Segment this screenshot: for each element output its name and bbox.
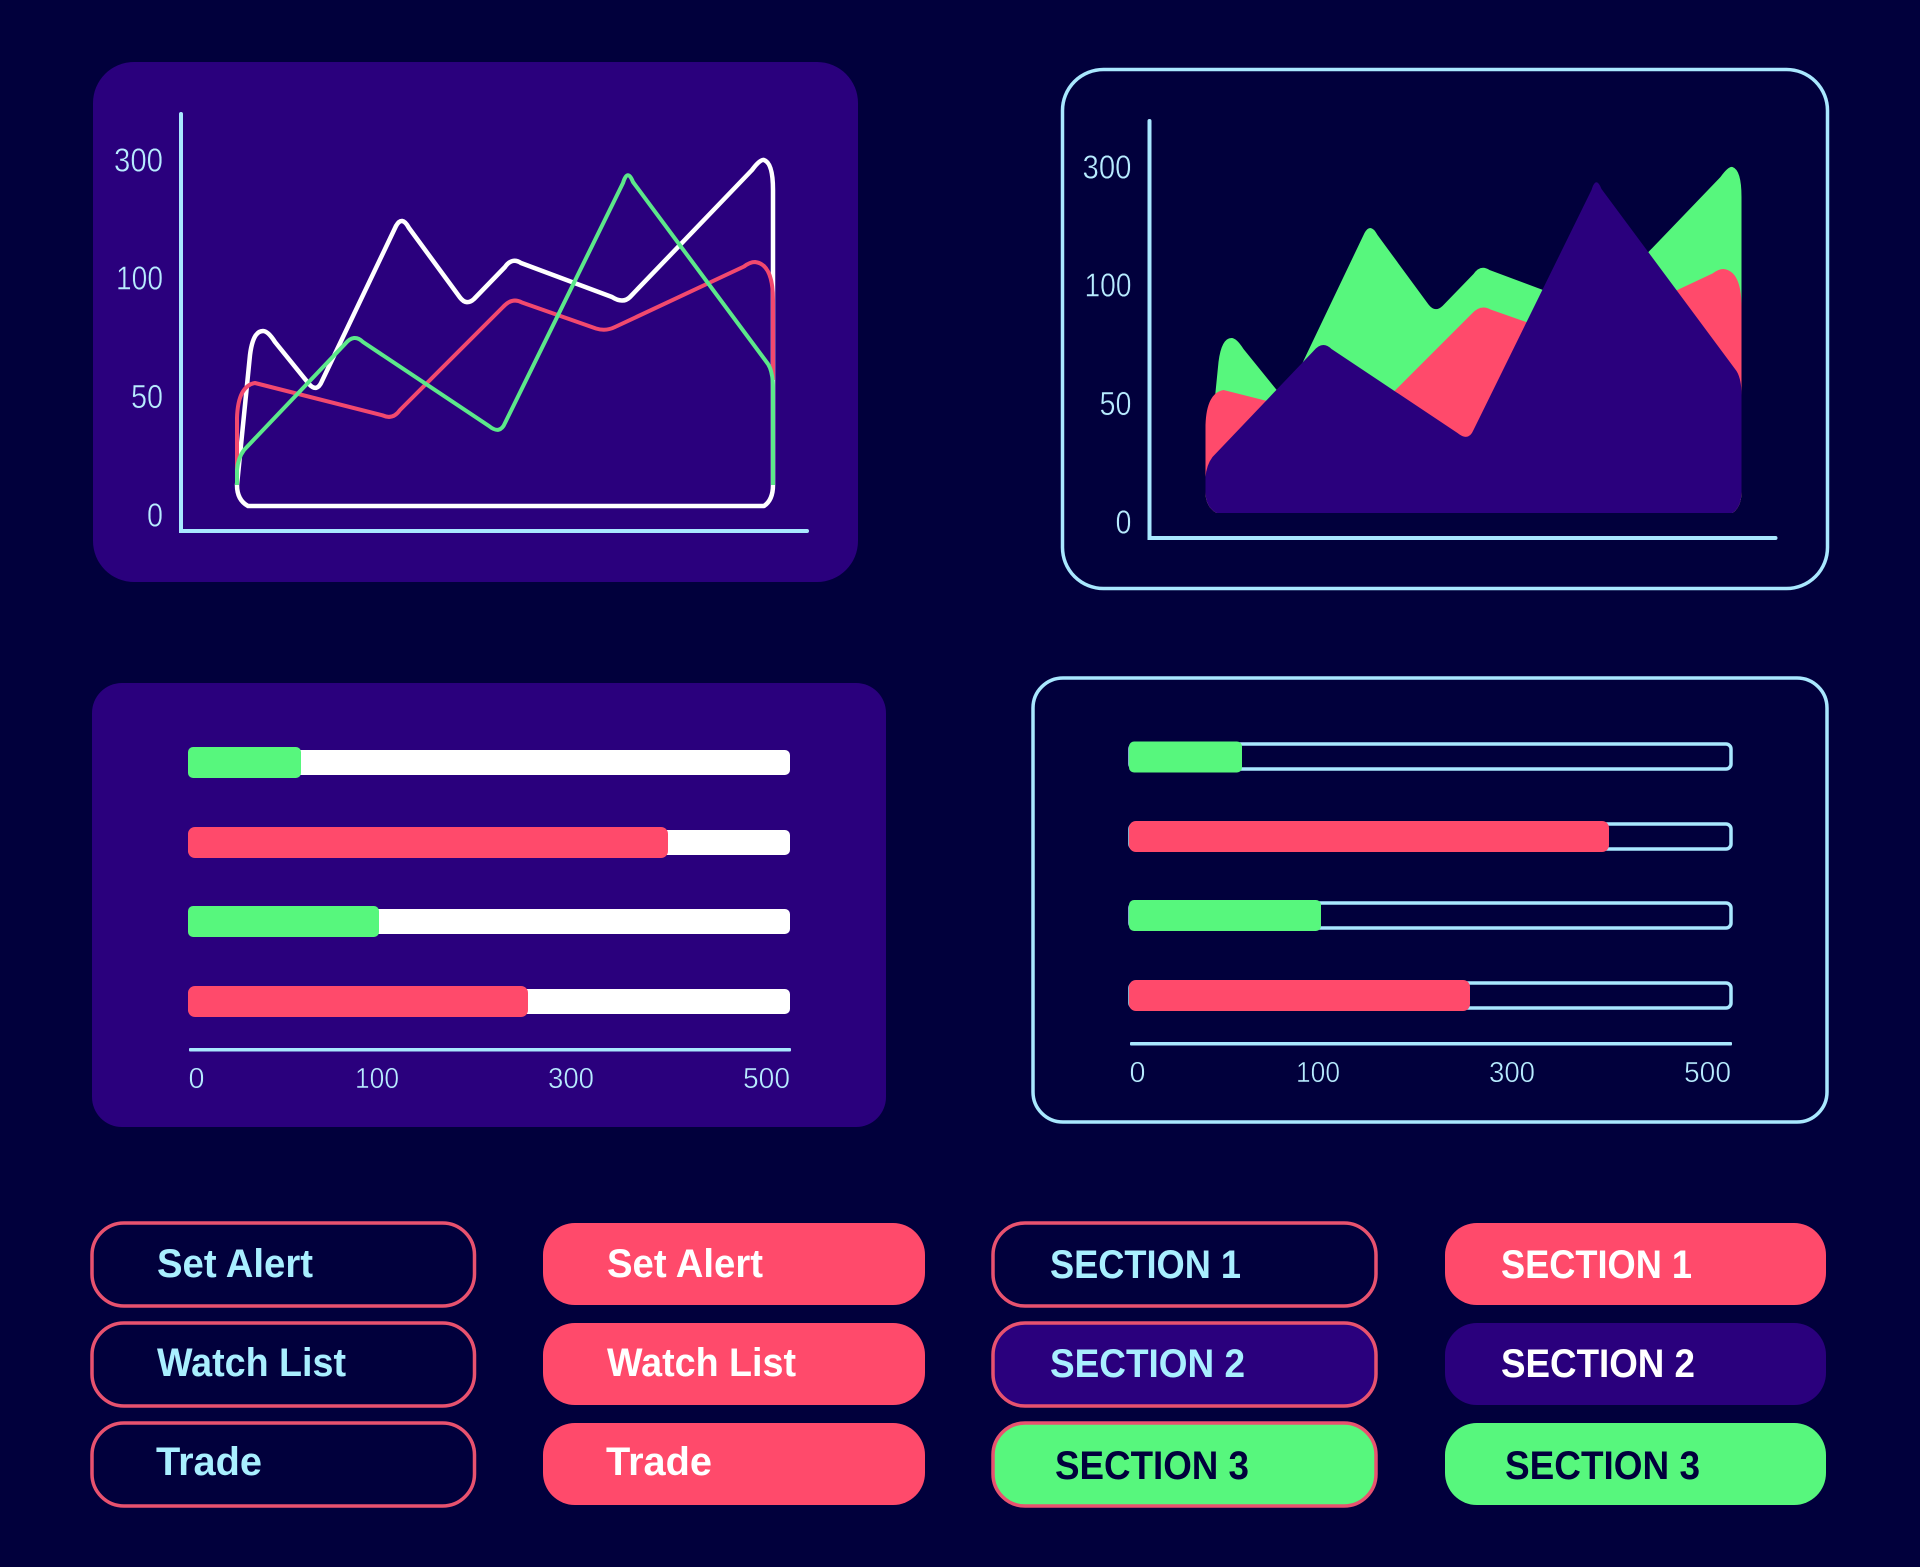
button: Section 3 filled bbox=[1445, 1423, 1826, 1505]
button: Section 3 outline: SECTION 3 bbox=[1055, 1444, 1249, 1488]
button: Section 1 filled bbox=[1445, 1223, 1826, 1305]
button: Section 3 outline bbox=[993, 1423, 1376, 1506]
outline bar axis line bbox=[1130, 1042, 1732, 1046]
line chart y-axis labels bbox=[114, 142, 163, 534]
panel: area chart bbox=[1062, 70, 1828, 588]
outline bar axis labels: 300 bbox=[1489, 1057, 1535, 1089]
outline bar row 4 bbox=[1129, 980, 1731, 1011]
button: Section 2 outline bbox=[993, 1323, 1376, 1406]
line chart axes bbox=[181, 114, 807, 531]
button: Trade outline bbox=[92, 1423, 474, 1506]
line chart y-axis labels: 0 bbox=[147, 496, 163, 534]
outline bar axis labels: 100 bbox=[1296, 1057, 1340, 1089]
button: Trade filled: Trade bbox=[606, 1440, 712, 1484]
area chart y-axis labels: 300 bbox=[1082, 148, 1132, 186]
outline bar row 3 bbox=[1129, 900, 1731, 931]
button: Watch List outline: Watch List bbox=[157, 1341, 346, 1385]
button: Trade filled bbox=[543, 1423, 925, 1505]
bar axis labels: 0 bbox=[188, 1063, 204, 1095]
red area bbox=[1206, 269, 1742, 513]
line chart y-axis labels: 50 bbox=[131, 378, 163, 415]
button: Section 1 outline: SECTION 1 bbox=[1050, 1243, 1241, 1287]
red data line bbox=[237, 262, 773, 485]
outline bar axis labels: 0 bbox=[1130, 1057, 1146, 1089]
outline bar row 1 bbox=[1129, 742, 1731, 772]
bar axis labels: 100 bbox=[355, 1063, 399, 1095]
bar axis labels: 300 bbox=[548, 1063, 594, 1095]
button: Watch List filled bbox=[543, 1323, 925, 1405]
area chart y-axis labels: 0 bbox=[1116, 504, 1132, 540]
panel: filled progress bars bbox=[92, 683, 886, 1127]
button: Section 2 filled bbox=[1445, 1323, 1826, 1405]
outline bar axis labels bbox=[1130, 1057, 1731, 1089]
line chart y-axis labels: 100 bbox=[116, 260, 163, 296]
button: Set Alert filled bbox=[543, 1223, 925, 1305]
area chart y-axis labels: 50 bbox=[1100, 385, 1132, 422]
button: Watch List outline bbox=[92, 1323, 474, 1406]
line chart y-axis labels: 300 bbox=[114, 142, 163, 178]
bar axis labels: 500 bbox=[743, 1063, 790, 1095]
button: Set Alert outline: Set Alert bbox=[157, 1242, 313, 1286]
area chart y-axis labels: 100 bbox=[1084, 266, 1132, 304]
bar row 1 bbox=[188, 747, 790, 778]
green data line bbox=[237, 175, 773, 485]
outline bar axis labels: 500 bbox=[1684, 1057, 1731, 1089]
panel: outlined progress bars bbox=[1033, 678, 1827, 1122]
button: Section 2 filled: SECTION 2 bbox=[1501, 1342, 1695, 1386]
area chart axes bbox=[1150, 121, 1776, 538]
button: Section 3 filled: SECTION 3 bbox=[1505, 1444, 1700, 1488]
area plot bbox=[1206, 167, 1742, 513]
bar row 3 bbox=[188, 906, 790, 937]
bar axis labels bbox=[188, 1063, 790, 1095]
button: Section 1 outline bbox=[993, 1223, 1376, 1306]
button: Watch List filled: Watch List bbox=[607, 1341, 796, 1385]
button: Section 1 filled: SECTION 1 bbox=[1501, 1243, 1692, 1287]
white data line bbox=[237, 160, 773, 506]
bar row 4 bbox=[188, 986, 790, 1017]
green area bbox=[1206, 167, 1742, 513]
bar axis line bbox=[189, 1048, 791, 1052]
area chart y-axis labels bbox=[1082, 148, 1132, 540]
bar row 2 bbox=[188, 827, 790, 858]
button: Set Alert outline bbox=[92, 1223, 474, 1306]
purple area bbox=[1206, 182, 1742, 513]
button: Set Alert filled: Set Alert bbox=[607, 1242, 763, 1286]
button: Section 2 outline: SECTION 2 bbox=[1050, 1342, 1245, 1386]
button: Trade outline: Trade bbox=[156, 1440, 262, 1484]
outline bar row 2 bbox=[1129, 821, 1731, 852]
panel: line chart bbox=[93, 62, 858, 582]
